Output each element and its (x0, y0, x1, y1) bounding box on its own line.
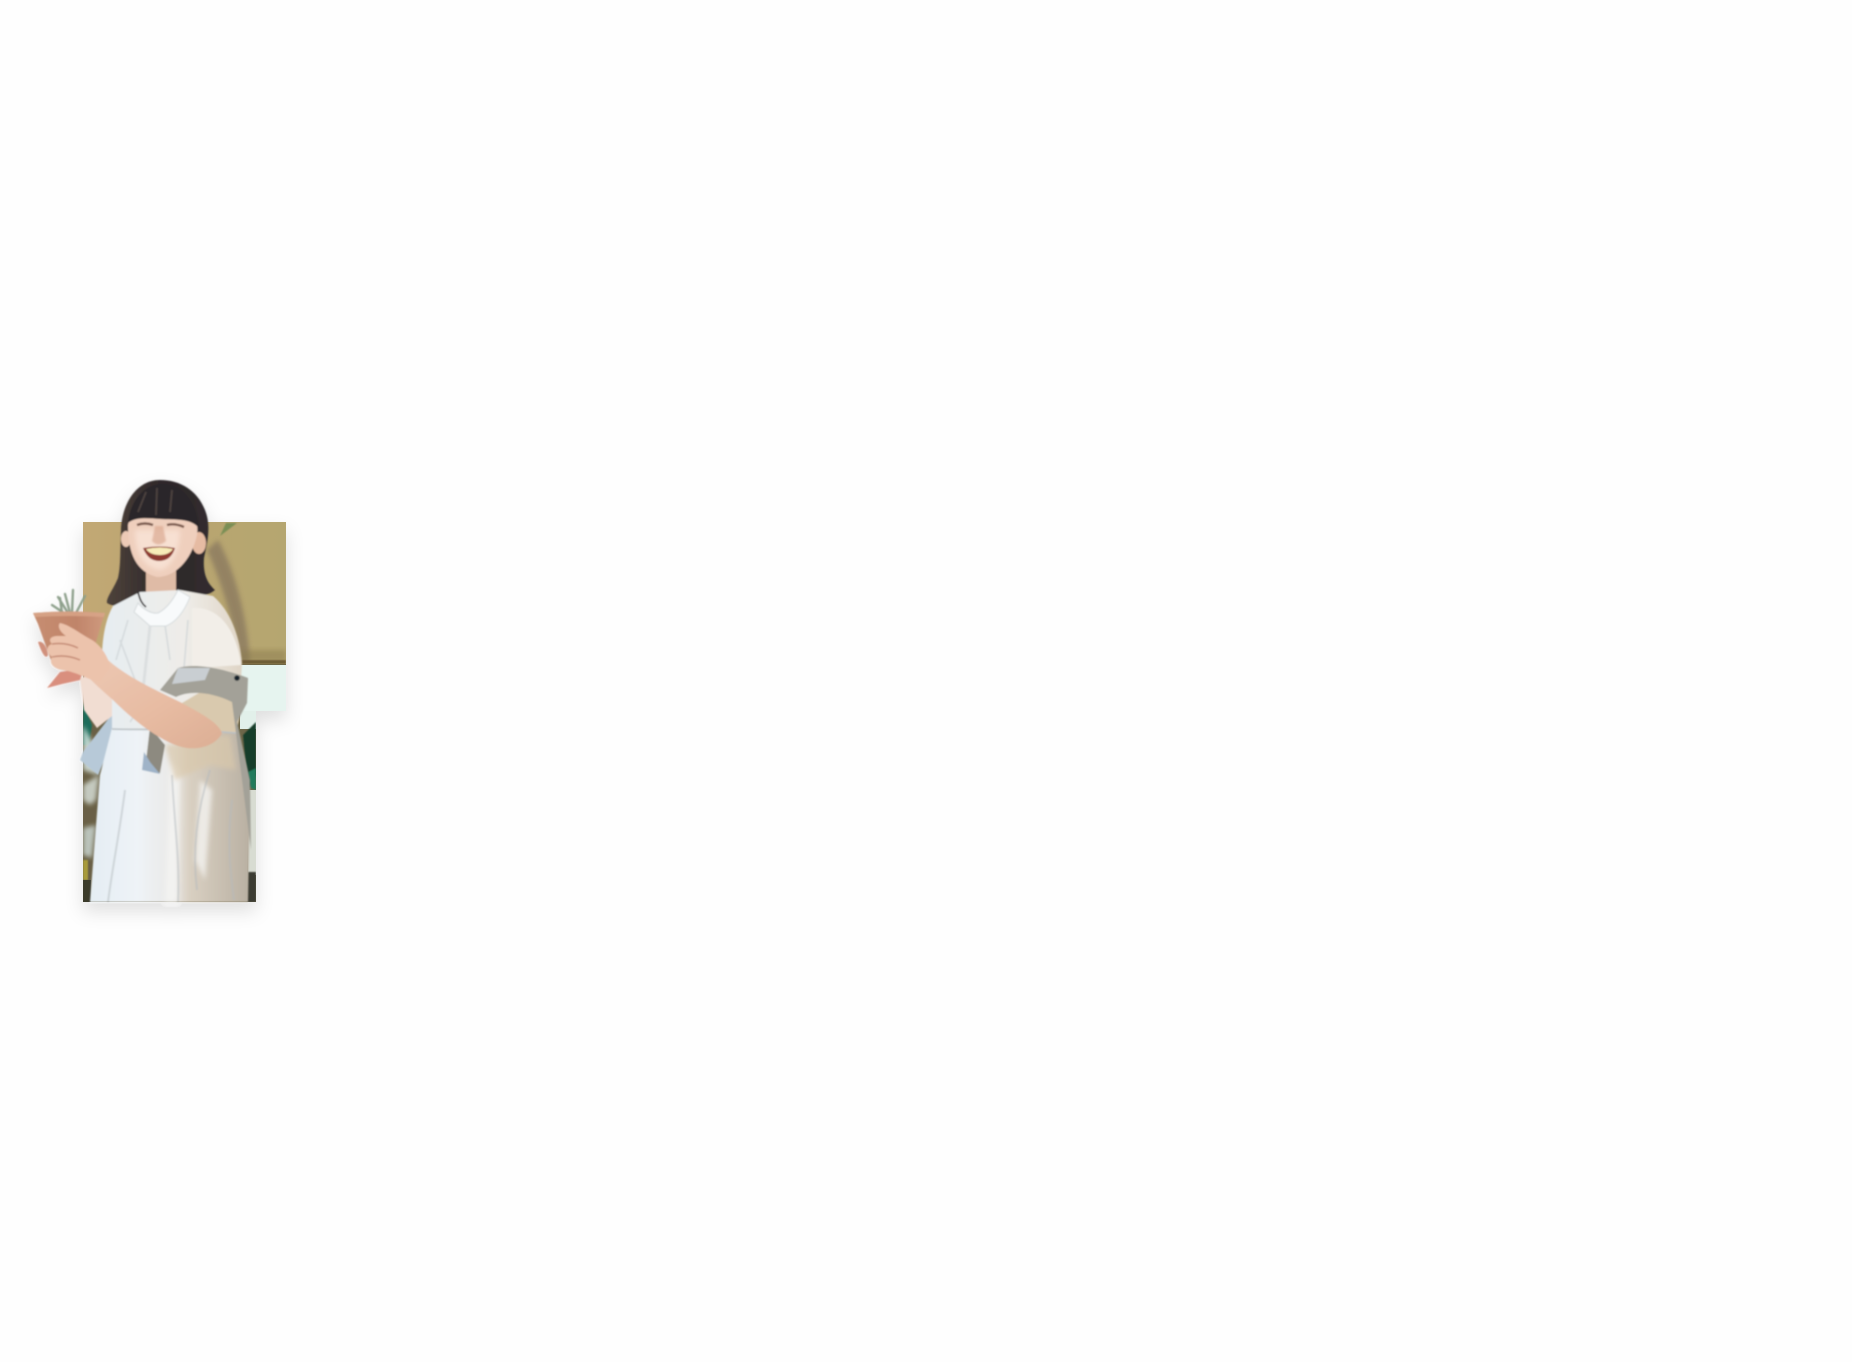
dress warm shadow (165, 735, 236, 780)
left foliage (83, 700, 109, 902)
left ear (121, 531, 131, 547)
rear fingers (38, 642, 48, 657)
nose (152, 526, 166, 544)
sleeve warm shading (182, 690, 244, 733)
dress white highlight streaks (165, 760, 212, 902)
button placket (143, 626, 150, 690)
right foliage (243, 722, 256, 790)
stepped photo background (83, 522, 286, 902)
blurred tree trunk (207, 540, 250, 664)
face (128, 516, 197, 577)
wall darkening toward the window (242, 649, 286, 660)
rear forearm (80, 672, 115, 728)
dark window band (241, 660, 286, 664)
necklace cord (138, 592, 146, 607)
plant (52, 590, 85, 613)
mouth (143, 546, 175, 561)
blurred wall (83, 522, 286, 664)
finger creases (52, 644, 80, 660)
hair back (107, 480, 215, 606)
photo collage: woman holding a plant (32, 478, 292, 918)
figure (33, 480, 251, 902)
eyes (137, 524, 184, 527)
right ear (192, 532, 206, 554)
face highlight and right shading (135, 530, 180, 570)
bodice wrinkles (116, 620, 188, 722)
button dark spot (234, 675, 240, 681)
front hand (48, 623, 110, 682)
dress folds (108, 770, 234, 902)
waist seam (112, 729, 236, 733)
leaf in background (220, 523, 237, 536)
upper dress bodice (102, 590, 242, 733)
fringe (128, 484, 199, 528)
grey tied shirt on waist (142, 666, 251, 850)
terracotta pot (33, 612, 105, 663)
lower dress (90, 728, 250, 902)
front hanging tail (145, 727, 165, 773)
pot rim (33, 612, 105, 617)
neck (146, 568, 176, 612)
hanging grey-blue sleeve (80, 714, 112, 775)
cut-out photo group (33, 480, 286, 902)
collar (134, 590, 190, 626)
front arm (84, 660, 222, 748)
teeth (146, 548, 173, 555)
bright window (240, 665, 286, 711)
